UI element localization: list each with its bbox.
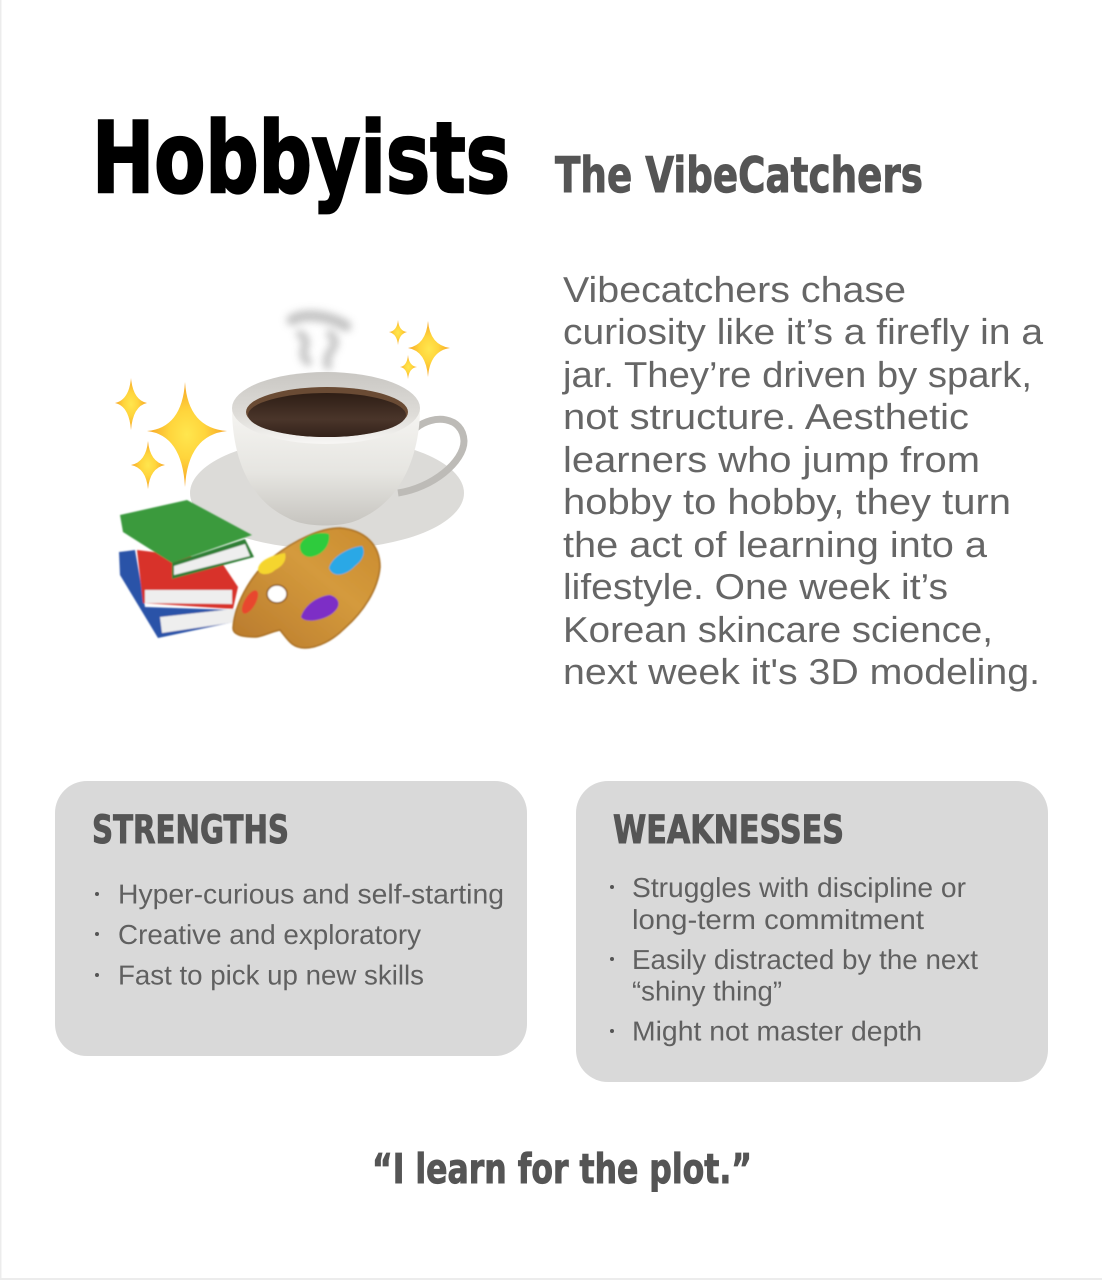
description text block: [562, 269, 1044, 692]
list: weaknesses: Easily distracted by the next: [632, 944, 978, 975]
description text block: lifestyle. One week it’s: [563, 566, 948, 607]
subtitle: The VibeCatchers: The VibeCatchers: [555, 147, 923, 204]
icon: sparkles right: [389, 320, 450, 379]
icon: cup handle: [398, 419, 464, 493]
icon: paint palette: [233, 528, 380, 648]
list: weaknesses: long-term commitment: [632, 904, 924, 935]
heading: weaknesses: WEAKNESSES: [613, 808, 844, 853]
description text block: next week it's 3D modeling.: [563, 651, 1040, 692]
description text block: the act of learning into a: [563, 524, 988, 565]
description text block: jar. They’re driven by spark,: [562, 354, 1032, 395]
list: strengths: [95, 878, 504, 990]
description text block: learners who jump from: [563, 439, 980, 480]
illustration: coffee, sparkles, books and palette: [115, 316, 464, 648]
list: weaknesses: Might not master depth: [632, 1016, 922, 1046]
quote: “I learn for the plot.”: [372, 1145, 752, 1193]
title: Hobbyists: Hobbyists: [92, 102, 510, 216]
list: strengths: Hyper-curious and self-starting: [118, 878, 504, 910]
heading: strengths: STRENGTHS: [92, 808, 289, 853]
icon: steam: [292, 316, 346, 366]
list: weaknesses: “shiny thing”: [632, 976, 782, 1006]
list: strengths: Fast to pick up new skills: [118, 960, 424, 990]
panel: weaknesses: [576, 781, 1048, 1082]
icon: cup: [232, 372, 420, 526]
description text block: hobby to hobby, they turn: [563, 481, 1011, 522]
list: strengths: Creative and exploratory: [118, 919, 421, 950]
icon: stack of books: [119, 500, 254, 638]
icon: sparkles left: [115, 378, 227, 489]
list: weaknesses: Struggles with discipline or: [632, 872, 966, 903]
description text block: not structure. Aesthetic: [563, 396, 969, 437]
panel: strengths: [55, 781, 527, 1056]
list: weaknesses: [610, 872, 978, 1046]
icon: saucer: [190, 437, 464, 549]
description text block: Vibecatchers chase: [563, 269, 906, 310]
description text block: curiosity like it’s a firefly in a: [563, 311, 1044, 352]
description text block: Korean skincare science,: [563, 609, 993, 650]
